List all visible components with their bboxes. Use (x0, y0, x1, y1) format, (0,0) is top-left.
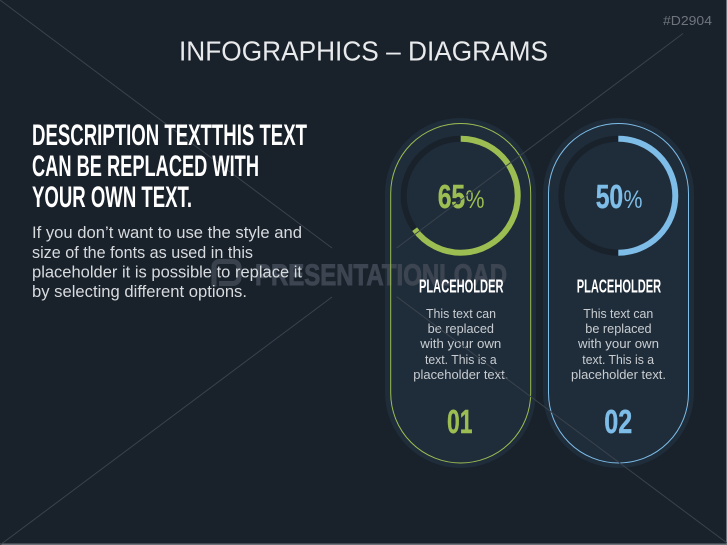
description heading (32, 119, 307, 214)
card 02 text: with your own (577, 337, 659, 351)
card 02 text: placeholder text. (571, 368, 666, 382)
card 01 text: with your own (419, 337, 501, 351)
donut chart: 65% (404, 139, 518, 253)
description heading: YOUR OWN TEXT. (32, 181, 192, 214)
description heading: CAN BE REPLACED WITH (32, 150, 259, 183)
card 02 number: 02 (604, 403, 632, 440)
panel: card 02 (548, 124, 688, 463)
card: 01 outer halo (385, 118, 536, 468)
card 02 text: be replaced (585, 322, 652, 336)
description heading: DESCRIPTION TEXTTHIS TEXT (32, 119, 307, 152)
card 01 outline (391, 124, 531, 463)
card 02 heading: PLACEHOLDER (577, 276, 661, 296)
description body text: by selecting different options. (32, 283, 247, 301)
value: 65%: % (466, 186, 484, 214)
watermark: PRESENTATIONLOAD (255, 259, 507, 292)
card 01 number: 01 (447, 403, 472, 440)
card 02 text: text. This is a (582, 353, 654, 367)
card 01 text (413, 307, 508, 382)
code label: #D2904 (663, 13, 712, 28)
card 01 text: be replaced (428, 322, 494, 336)
card 02 outline (548, 124, 688, 463)
card: 02 outer halo (543, 118, 694, 468)
value: 50%: 50 (596, 178, 623, 215)
card 01 text: text. This is a (425, 353, 497, 367)
title: INFOGRAPHICS – DIAGRAMS (179, 36, 548, 66)
value: 50%: % (624, 186, 642, 214)
description body text: size of the fonts as used in this (32, 244, 253, 262)
card 02 text: This text can (583, 307, 653, 321)
card 01 heading: PLACEHOLDER (419, 276, 504, 296)
description body text: If you don’t want to use the style and (32, 224, 302, 242)
description body text: placeholder it is possible to replace it (32, 264, 302, 282)
value: 65%: 65 (438, 178, 465, 215)
card 02 text (571, 307, 666, 382)
donut chart: 50% (561, 139, 675, 253)
panel: card 01 (391, 124, 531, 463)
card 01 text: This text can (426, 307, 496, 321)
description body text (32, 224, 302, 301)
card 01 text: placeholder text. (413, 368, 508, 382)
